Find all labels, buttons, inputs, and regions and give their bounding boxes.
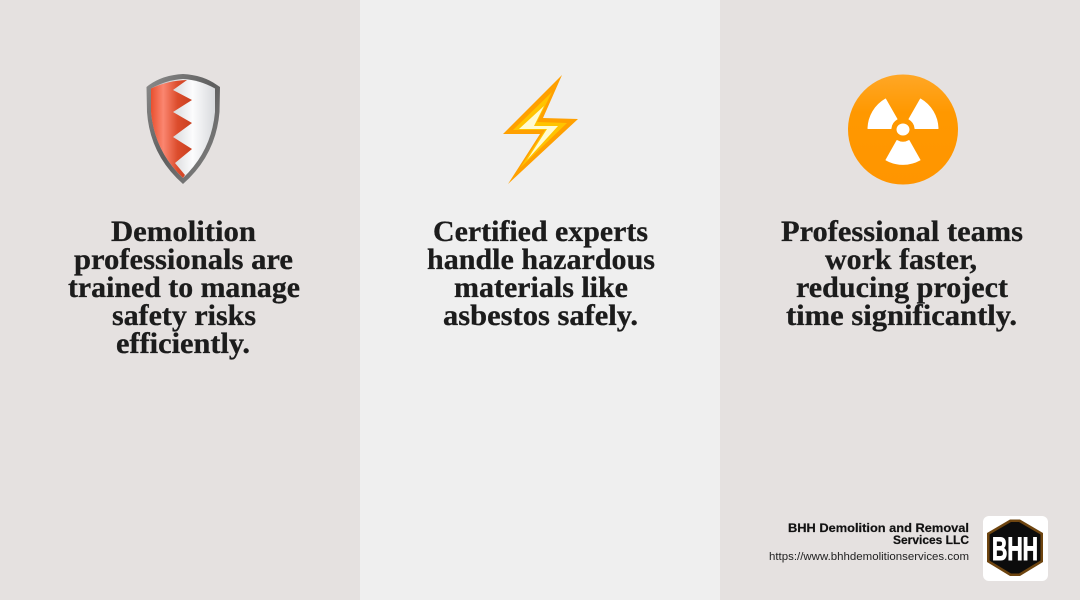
- company website: https://www.bhhdemolitionservices.com: [769, 551, 969, 563]
- company name: Services LLC: [893, 533, 969, 547]
- text block: right panel statement: work faster,: [825, 243, 977, 276]
- text block: middle panel statement: handle hazardous: [427, 243, 655, 276]
- text block: middle panel statement: asbestos safely.: [443, 299, 638, 332]
- text block: left panel statement: efficiently.: [116, 327, 250, 360]
- panel: left background: [0, 0, 360, 600]
- logo: BHH badge: [983, 516, 1048, 581]
- text block: middle panel statement: materials like: [454, 271, 628, 304]
- panel: middle background: [360, 0, 720, 600]
- text block: left panel statement: trained to manage: [68, 271, 300, 304]
- text block: right panel statement: time significantly.: [786, 299, 1017, 332]
- text block: middle panel statement: Certified experts: [433, 215, 648, 248]
- text block: right panel statement: Professional teams: [781, 215, 1023, 248]
- text block: left panel statement: professionals are: [74, 243, 293, 276]
- logo: BHH badge: BHH: [992, 531, 1038, 567]
- company name: BHH Demolition and Removal: [788, 521, 969, 535]
- panel: right background: [720, 0, 1080, 600]
- text block: left panel statement: safety risks: [112, 299, 256, 332]
- icon: shield: [146, 74, 220, 184]
- text block: left panel statement: Demolition: [111, 215, 256, 248]
- text block: right panel statement: reducing project: [796, 271, 1008, 304]
- icon: lightning bolt: [503, 75, 578, 184]
- icon: radiation symbol: [848, 74, 958, 184]
